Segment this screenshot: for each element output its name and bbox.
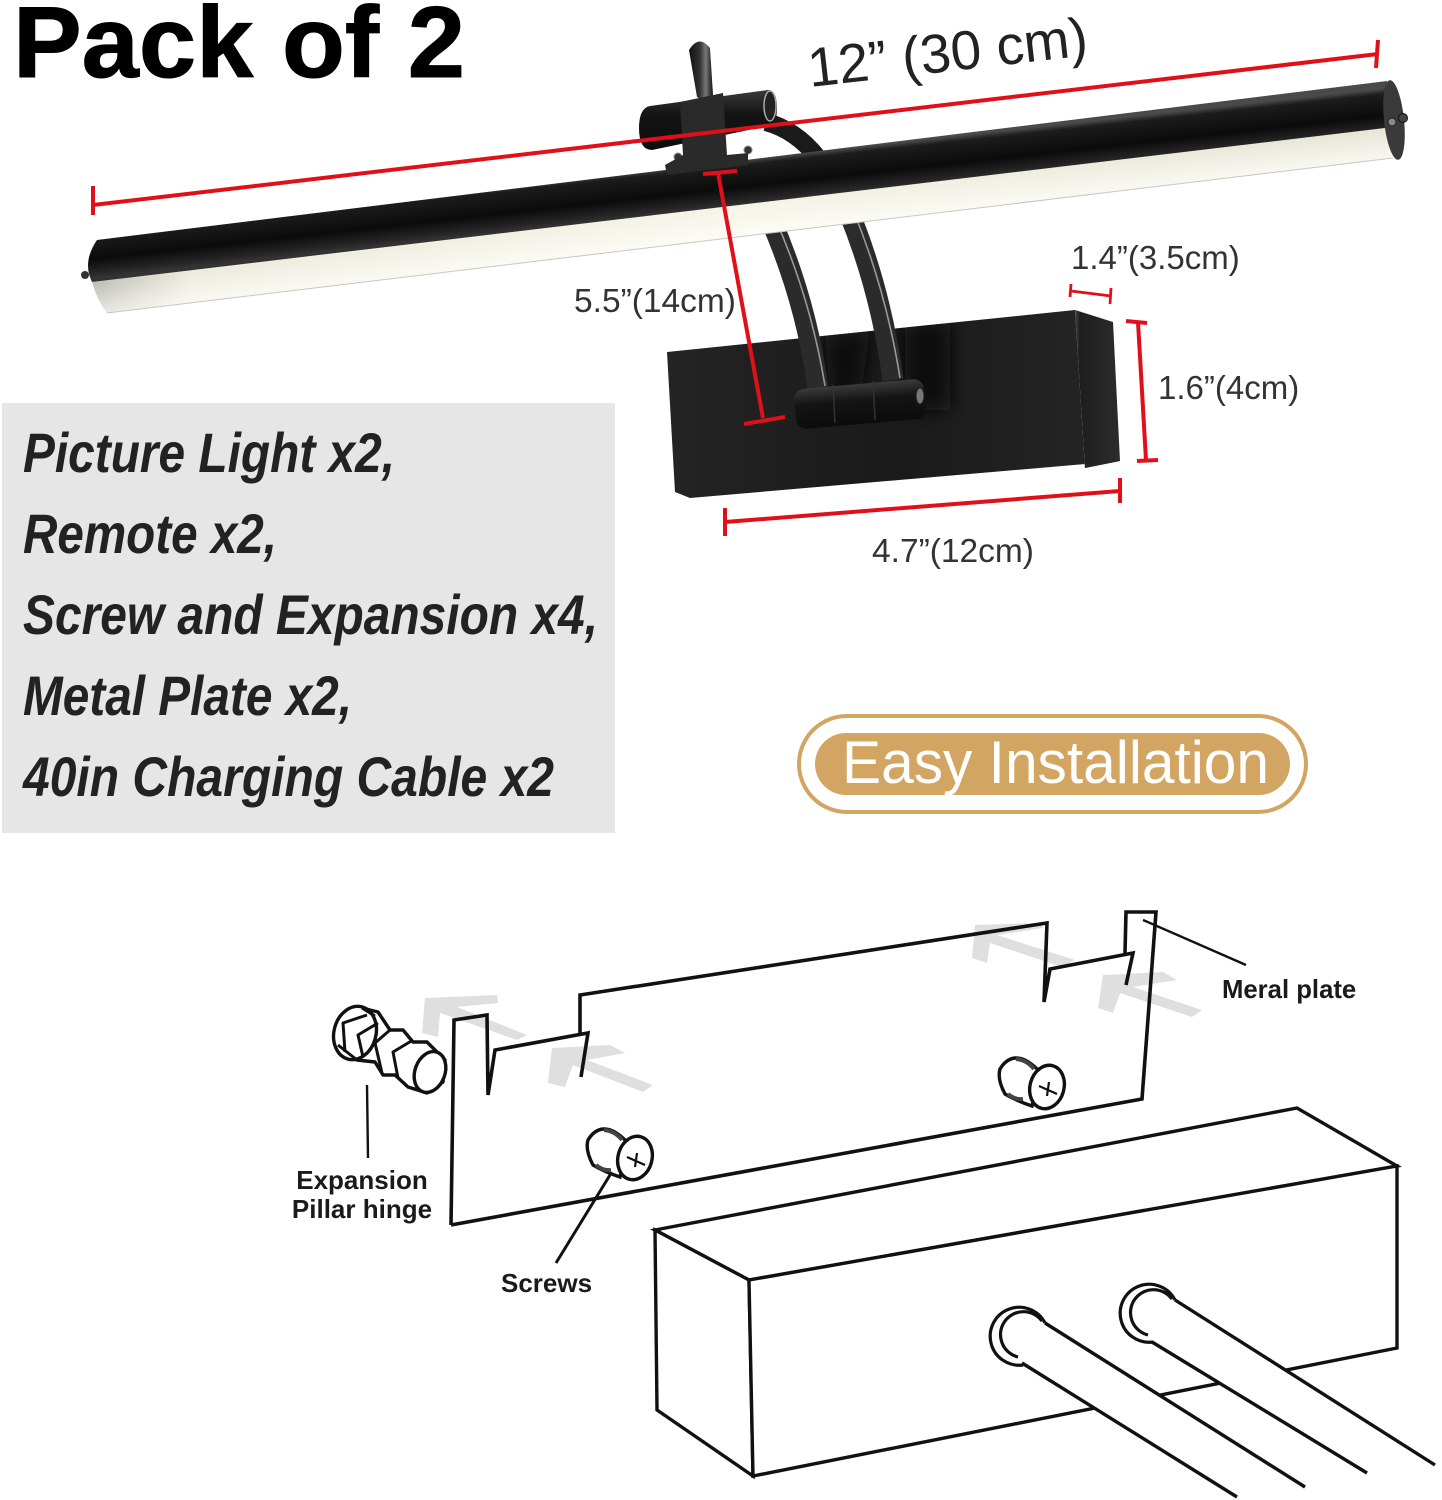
arm above the bar: [766, 122, 818, 158]
curved lower arms: [770, 210, 900, 388]
dimension: width 12 in: [93, 5, 1378, 215]
dimension: box height 1.6 in: 1.6”(4cm): [1158, 369, 1299, 406]
badge: easy installation: [799, 716, 1306, 812]
switch handle: [689, 41, 713, 99]
tube right: [1120, 1284, 1435, 1473]
panel: package contents: Picture Light x2,: [23, 421, 395, 484]
hinge cylinder: [639, 90, 777, 150]
panel: package contents: Remote x2,: [23, 502, 277, 565]
screw left: [587, 1129, 657, 1184]
panel: package contents: Screw and Expansion x4,: [23, 583, 598, 646]
label: screws: Screws: [501, 1268, 592, 1298]
dimension: box depth 1.4 in: [1070, 239, 1240, 304]
panel: package contents: Metal Plate x2,: [23, 664, 352, 727]
label: expansion pillar hinge: Expansion: [296, 1165, 428, 1195]
dimension: depth 5.5 in: [574, 171, 785, 424]
dimension: box depth 1.4 in: 1.4”(3.5cm): [1071, 239, 1240, 276]
grey direction arrows: [422, 923, 1202, 1092]
installation diagram: [292, 912, 1435, 1497]
dimension: depth 5.5 in: 5.5”(14cm): [574, 283, 736, 320]
light bar diffuser: [92, 128, 1393, 313]
badge: easy installation: Easy Installation: [842, 729, 1269, 796]
pivot screw: [916, 388, 924, 404]
label: metal plate: Meral plate: [1222, 976, 1356, 1004]
mounting bracket: [665, 93, 748, 175]
shadow behind pivot: [825, 320, 950, 410]
bracket screws: [674, 146, 752, 161]
panel: package contents: [2, 403, 615, 833]
leader lines: [367, 920, 1246, 1263]
screw right: [999, 1058, 1069, 1113]
hinge end screw: [764, 91, 776, 121]
metal plate outline: [451, 912, 1156, 1225]
mounting box side: [1075, 310, 1120, 468]
lower pivot cylinder: [794, 378, 926, 430]
dimension: box width 4.7 in: [725, 478, 1120, 570]
dimension: box width 4.7 in: 4.7”(12cm): [872, 533, 1034, 570]
label: expansion pillar hinge: [292, 1165, 432, 1224]
expansion pillar: [328, 1001, 451, 1097]
product photo: picture light: [81, 41, 1408, 498]
tube left: [990, 1305, 1305, 1497]
lamp base box: [655, 1108, 1397, 1476]
light bar black shade: [88, 81, 1387, 282]
left end nub: [81, 271, 89, 279]
dimension: width 12 in: 12” (30 cm): [804, 5, 1091, 99]
right end cap: [1380, 79, 1408, 161]
mounting box front: [667, 310, 1120, 498]
label: expansion pillar hinge: Pillar hinge: [292, 1194, 432, 1224]
panel: package contents: 40in Charging Cable x2: [22, 745, 554, 808]
dimension: box height 1.6 in: [1126, 321, 1299, 461]
